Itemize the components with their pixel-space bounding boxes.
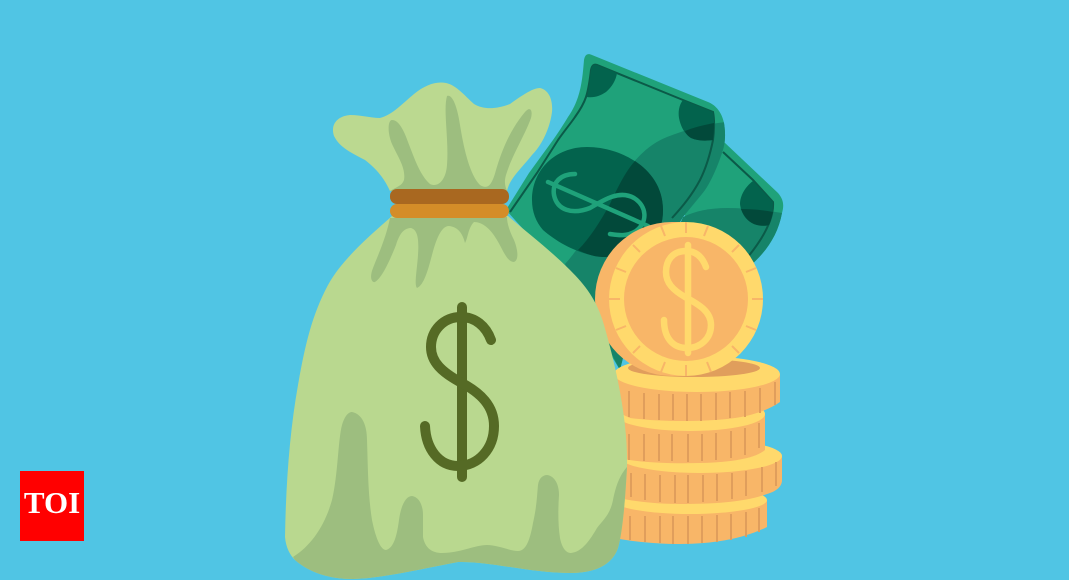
standing coin bbox=[595, 222, 763, 376]
coin rim bbox=[609, 222, 763, 376]
illustration: money bag, banknotes and coins bbox=[285, 54, 784, 579]
coin stack bbox=[600, 356, 782, 544]
logo: TOI bbox=[20, 471, 84, 541]
coin 1 recess bbox=[628, 359, 760, 377]
bag top cloth bbox=[333, 82, 552, 191]
banknote shadow bbox=[565, 122, 730, 370]
bag body bbox=[285, 216, 627, 579]
banknote centre oval bbox=[532, 147, 663, 257]
coin 4 (bottom) bbox=[600, 486, 767, 544]
banknote: back bbox=[665, 142, 783, 266]
bag dollar sign bbox=[425, 307, 494, 477]
back note corner bbox=[740, 181, 773, 226]
coin face bbox=[624, 237, 748, 361]
bag bottom shading bbox=[293, 412, 627, 579]
banknote: front bbox=[506, 54, 730, 370]
coin dollar sign bbox=[664, 245, 711, 353]
coin 2 bbox=[610, 397, 765, 463]
bag tie: orange band bbox=[390, 204, 509, 218]
bag lower neck folds bbox=[371, 217, 517, 288]
banknote inner border bbox=[510, 65, 714, 218]
money bag bbox=[285, 82, 627, 579]
bag top folds bbox=[389, 96, 532, 191]
banknote corner: top left bbox=[587, 65, 617, 97]
bag tie: dark band bbox=[390, 189, 509, 204]
banknote dollar sign bbox=[548, 174, 648, 235]
coin rim ticks bbox=[609, 222, 763, 376]
coin 3 bbox=[610, 439, 782, 504]
coin 1 (top) bbox=[613, 356, 780, 421]
logo: TOI: TOI bbox=[24, 485, 80, 520]
banknote corner: top right bbox=[679, 100, 714, 141]
